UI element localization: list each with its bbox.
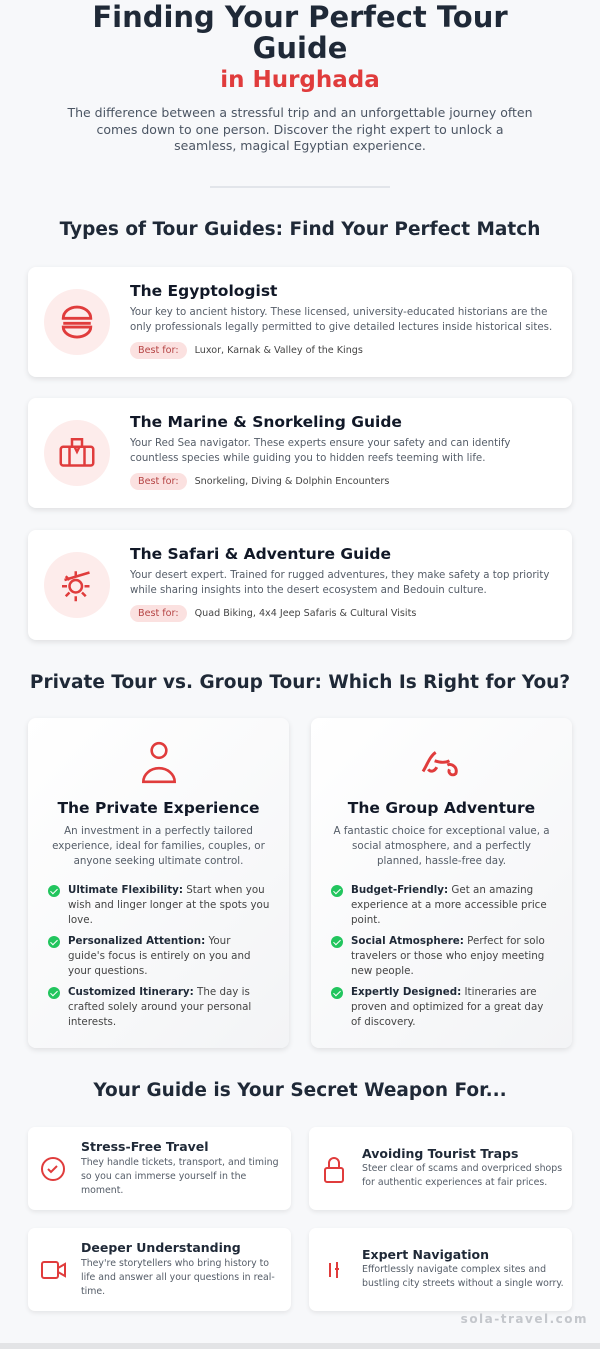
panel: group [311, 718, 572, 1048]
panel: group: social atmosphere, and a perfectly [352, 840, 531, 852]
panel: private: Personalized Attention: Your [68, 935, 230, 947]
card: marine: Best for: [138, 476, 179, 487]
card: safari: Your desert expert. Trained for rugged adventures, they make safety a top priority [130, 570, 549, 581]
card: egyptologist: only professionals legally permitted to give detailed lectures inside historical sites. [130, 322, 552, 333]
card: tourist traps: for authentic experiences at fair prices. [362, 1177, 547, 1188]
intro text [67, 105, 533, 153]
panel: private: An investment in a perfectly tailored [64, 825, 253, 837]
icon: person [142, 742, 176, 784]
panel: group: Social Atmosphere: Perfect for solo [351, 935, 545, 947]
intro text: comes down to one person. Discover the right expert to unlock a [96, 122, 504, 136]
card: marine: Snorkeling, Diving & Dolphin Encounters [195, 476, 389, 487]
panel: group: point. [351, 914, 381, 926]
card: tourist traps: Avoiding Tourist Traps [362, 1146, 518, 1161]
panel: private: love. [68, 914, 93, 926]
card: stress-free: Stress-Free Travel [81, 1139, 209, 1154]
icon: video [41, 1261, 66, 1279]
icon: lock [324, 1157, 344, 1183]
panel: group: Expertly Designed: Itineraries are [351, 986, 537, 998]
panel: group: A fantastic choice for exceptional value, a [333, 825, 550, 837]
footer brand: sola-travel.com [461, 1312, 588, 1326]
intro text: seamless, magical Egyptian experience. [174, 138, 426, 153]
heading: secret weapon: Your Guide is Your Secret Weapon For... [93, 1080, 507, 1101]
card: safari: Best for: [138, 608, 179, 619]
heading: private vs group: Private Tour vs. Group Tour: Which Is Right for You? [30, 672, 570, 693]
title: in Hurghada [220, 67, 380, 93]
panel: private: Customized Itinerary: The day is [68, 986, 250, 998]
panel: group: travelers or those who enjoy meeting [351, 950, 544, 962]
card: expert navigation [309, 1228, 572, 1311]
card: expert navigation: Effortlessly navigate complex sites and [362, 1264, 546, 1275]
panel: private: crafted solely around your personal [68, 1001, 251, 1013]
title: Guide [253, 31, 347, 65]
panel: private [28, 718, 289, 1048]
card: tourist traps: Steer clear of scams and overpriced shops [362, 1163, 562, 1174]
card: marine: The Marine & Snorkeling Guide [130, 413, 402, 431]
icon: check circle [41, 1157, 65, 1181]
icon: navigation [329, 1262, 339, 1278]
card: marine [28, 398, 572, 508]
panel: group: The Group Adventure [348, 799, 535, 817]
panel: group: proven and optimized for a great day [351, 1001, 543, 1013]
card: deeper understanding [28, 1228, 291, 1311]
card: safari: Quad Biking, 4x4 Jeep Safaris & Cultural Visits [195, 608, 416, 619]
panel: group: experience at a more accessible price [351, 899, 547, 911]
card: stress-free: moment. [81, 1185, 123, 1196]
panel: private: anyone seeking ultimate control. [74, 855, 243, 867]
panel: private: The Private Experience [57, 799, 260, 817]
card: stress-free: They handle tickets, transport, and timing [81, 1157, 279, 1168]
card: egyptologist: Best for: [138, 345, 179, 356]
panel: group: planned, hassle-free day. [377, 855, 506, 867]
card: marine: Your Red Sea navigator. These experts ensure your safety and can identify [130, 438, 510, 449]
panel: private: experience, ideal for families, couples, or [52, 840, 265, 852]
card: egyptologist: Luxor, Karnak & Valley of the Kings [195, 345, 363, 356]
panel: private: guide's focus is entirely on you and [68, 950, 251, 962]
card: expert navigation: Expert Navigation [362, 1247, 489, 1262]
intro text: The difference between a stressful trip and an unforgettable journey often [67, 105, 533, 120]
panel: private: wish and linger longer at the spots you [68, 899, 269, 911]
card: safari [28, 530, 572, 640]
panel: private: your questions. [68, 965, 148, 977]
card: stress-free [28, 1127, 291, 1210]
panel: private: Ultimate Flexibility: Start when you [68, 884, 265, 896]
card: deeper understanding: time. [81, 1286, 105, 1297]
panel: group: new people. [351, 965, 414, 977]
card: tourist traps [309, 1127, 572, 1210]
heading: types: Types of Tour Guides: Find Your Perfect Match [60, 219, 540, 240]
card: safari: while sharing insights into the desert ecosystem and Bedouin culture. [130, 585, 487, 596]
panel: private: interests. [68, 1016, 116, 1028]
icon: egyptologist [44, 289, 110, 355]
icon: safari [44, 552, 110, 618]
title [92, 0, 508, 93]
card: deeper understanding: They're storytellers who bring history to [81, 1258, 269, 1269]
panel: group: of discovery. [351, 1016, 415, 1028]
icon: marine [44, 420, 110, 486]
card: expert navigation: bustling city streets without a single worry. [362, 1278, 564, 1289]
card: marine: countless species while guiding you to hidden reefs teeming with life. [130, 453, 485, 464]
icon: group [422, 751, 458, 776]
title: Finding Your Perfect Tour [92, 0, 508, 34]
panel: group: Budget-Friendly: Get an amazing [351, 884, 533, 896]
card: egyptologist [28, 267, 572, 377]
card: safari: The Safari & Adventure Guide [130, 545, 391, 563]
card: stress-free: so you can immerse yourself in the [81, 1171, 246, 1182]
card: deeper understanding: Deeper Understanding [81, 1240, 241, 1255]
card: deeper understanding: life and answer all your questions in real- [81, 1272, 275, 1283]
card: egyptologist: The Egyptologist [130, 282, 277, 300]
card: egyptologist: Your key to ancient history. These licensed, university-educated historians are the [130, 307, 547, 318]
